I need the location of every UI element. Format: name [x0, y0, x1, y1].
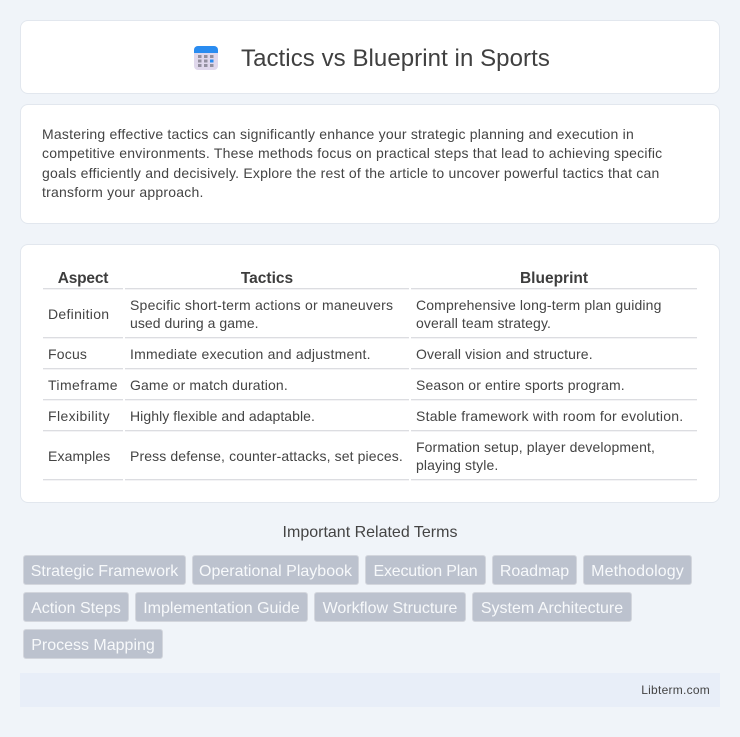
panel: intro: [20, 104, 720, 224]
related terms tags: Methodology: [591, 563, 684, 580]
row: focus: Overall vision and structure.: [416, 346, 593, 362]
intro text: transform your approach.: [42, 184, 204, 200]
related terms tags: [23, 555, 692, 659]
related terms tags: Execution Plan: [374, 563, 477, 580]
related terms heading: Important Related Terms: [283, 524, 457, 541]
intro text: [42, 126, 662, 200]
related terms tags: Operational Playbook: [199, 563, 352, 580]
footer credit: Libterm.com: [641, 683, 710, 697]
related terms tags: Process Mapping: [31, 637, 155, 654]
row: timeframe: Season or entire sports program.: [416, 377, 625, 393]
row: examples: Formation setup, player development,: [416, 439, 655, 455]
table headers: [58, 270, 588, 287]
row: focus: [48, 346, 593, 362]
footer: [20, 673, 720, 707]
title: Tactics vs Blueprint in Sports: [241, 45, 550, 72]
related terms tags: System Architecture: [481, 600, 623, 617]
row: timeframe: Timeframe: [48, 377, 118, 393]
row: flexibility: [48, 408, 683, 424]
row: flexibility: Flexibility: [48, 408, 110, 424]
row: flexibility: Stable framework with room for evolution.: [416, 408, 683, 424]
row: examples: [48, 439, 655, 473]
row: focus: Focus: [48, 346, 87, 362]
icon: calendar: [194, 46, 218, 70]
row: definition: used during a game.: [130, 315, 259, 331]
row: timeframe: [48, 377, 625, 393]
row: definition: Specific short-term actions or maneuvers: [130, 297, 393, 313]
related terms tags: Roadmap: [500, 563, 569, 580]
row: definition: [48, 297, 662, 331]
intro text: Mastering effective tactics can significantly enhance your strategic planning and execution in: [42, 126, 634, 142]
table: [43, 270, 697, 481]
intro text: competitive environments. These methods focus on practical steps that lead to achieving specific: [42, 145, 662, 161]
related terms tags: Strategic Framework: [31, 563, 178, 580]
related terms tags: Action Steps: [31, 600, 121, 617]
panel: comparison table: [20, 244, 720, 503]
table headers: Tactics: [241, 270, 293, 287]
row: definition: Comprehensive long-term plan guiding: [416, 297, 662, 313]
related terms tags: Workflow Structure: [323, 600, 457, 617]
intro text: goals efficiently and decisively. Explore the rest of the article to uncover powerful tactics that can: [42, 165, 660, 181]
panel: header: [20, 20, 720, 94]
row: flexibility: Highly flexible and adaptable.: [130, 408, 315, 424]
row: definition: overall team strategy.: [416, 315, 551, 331]
row: timeframe: Game or match duration.: [130, 377, 288, 393]
row: examples: playing style.: [416, 457, 498, 473]
row: examples: Press defense, counter-attacks, set pieces.: [130, 448, 403, 464]
row: focus: Immediate execution and adjustment.: [130, 346, 371, 362]
row: definition: Definition: [48, 306, 109, 322]
row: examples: Examples: [48, 448, 110, 464]
related terms tags: Implementation Guide: [143, 600, 300, 617]
table headers: Aspect: [58, 270, 108, 287]
table headers: Blueprint: [520, 270, 588, 287]
